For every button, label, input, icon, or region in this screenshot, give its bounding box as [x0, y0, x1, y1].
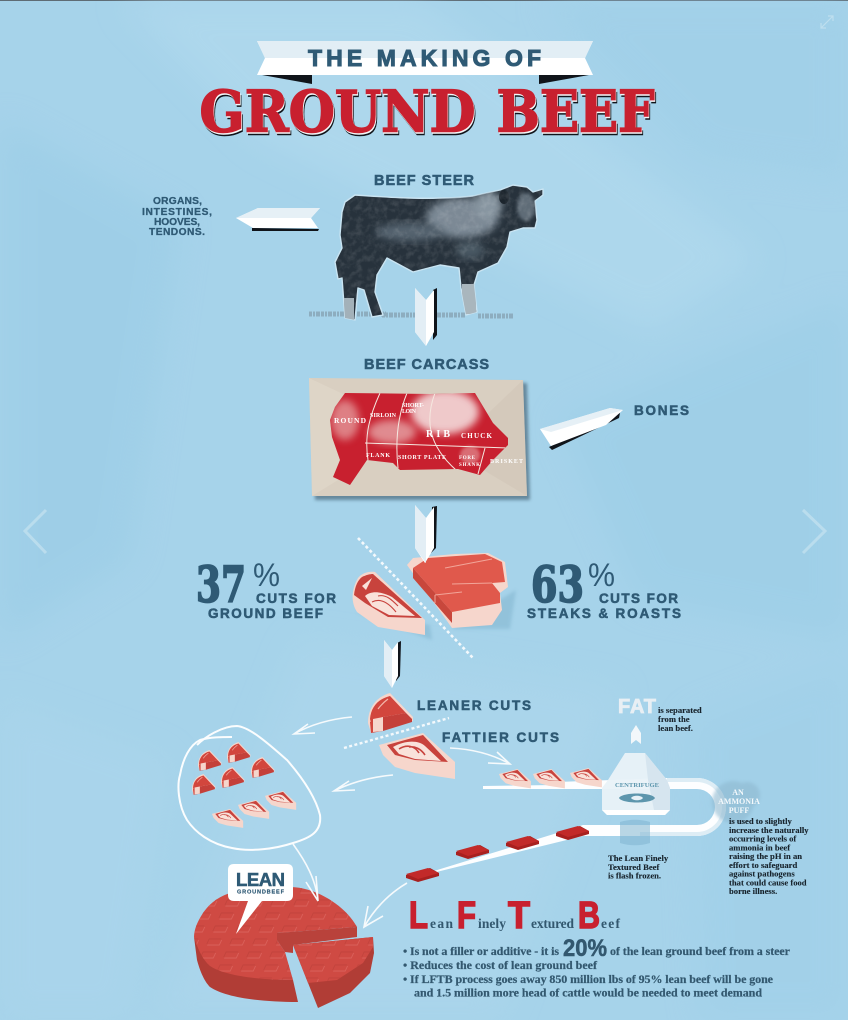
illustration: black steer	[309, 183, 547, 323]
stat: 37% cuts for ground beef: CUTS FOR	[256, 591, 336, 606]
steak: steaks and roasts share	[407, 553, 516, 629]
conveyor line	[408, 778, 726, 879]
text: flash frozen	[608, 853, 669, 880]
stat: 63% cuts for steaks and roasts: STEAKS & ROASTS	[527, 606, 681, 621]
steak: ground beef share	[353, 572, 432, 640]
stat: 63% cuts for steaks and roasts	[527, 555, 681, 621]
label: fattier cuts: FATTIER CUTS	[442, 730, 559, 745]
cut labels: ROUND	[334, 416, 367, 425]
text: ammonia explanation: against pathogens	[729, 868, 795, 878]
arrow: cuts to lean and fat sort	[384, 640, 401, 688]
label: centrifuge: CENTRIFUGE	[615, 782, 660, 789]
title: ground beef: GROUND	[200, 80, 476, 147]
stat: 37% cuts for ground beef	[196, 555, 336, 621]
text: ammonia explanation: occurring levels of	[729, 834, 796, 844]
cut: leaner	[368, 693, 413, 733]
title: ground beef: BEEF	[497, 80, 655, 147]
pile of cuts in a hand-drawn outline	[178, 726, 320, 850]
arrow: fat rising	[631, 725, 641, 744]
label: an ammonia puff	[718, 788, 760, 815]
heading: lean finely textured beef: T	[508, 895, 530, 937]
label: organs, intestines, hooves, tendons: TENDONS.	[149, 227, 205, 238]
label: organs, intestines, hooves, tendons: HOOVES,	[154, 217, 200, 228]
arrow: to organs	[236, 208, 320, 231]
cut: fattier	[379, 733, 455, 779]
bullet list: facts about LFTB: of the lean ground beef from a steer	[610, 944, 791, 958]
label: bones: BONES	[634, 403, 689, 418]
text: ammonia explanation: is used to slightly	[729, 816, 792, 826]
heading: lean finely textured beef: F	[457, 895, 476, 937]
label: leaner cuts: LEANER CUTS	[417, 698, 531, 713]
meat map	[330, 393, 508, 485]
cut labels: RIB	[426, 429, 450, 440]
arrow: carcass to cuts	[415, 505, 437, 563]
navigation chevron left	[25, 510, 46, 553]
spin icon	[619, 794, 655, 802]
text: flash frozen: is flash frozen.	[608, 870, 661, 880]
label: an ammonia puff: AMMONIA	[718, 797, 760, 806]
text: ammonia explanation: that could cause food	[729, 878, 807, 888]
text: fat is separated: is separated	[658, 705, 702, 715]
cut labels: SIRLOIN	[370, 413, 397, 419]
dotted divider: lean and fat	[344, 718, 449, 748]
label: beef carcass: BEEF CARCASS	[364, 357, 489, 373]
cut labels	[334, 403, 523, 468]
cut labels: BRISKET	[490, 459, 523, 465]
cut labels: FORE	[459, 456, 476, 461]
label: organs, intestines, hooves, tendons: INTESTINES,	[142, 207, 212, 218]
label: beef steer: BEEF STEER	[374, 173, 475, 189]
heading: lean finely textured beef: B	[578, 895, 600, 937]
label: an ammonia puff: AN	[732, 788, 744, 797]
heading: lean finely textured beef: inely	[478, 916, 506, 931]
text: flash frozen: The Lean Finely	[608, 853, 669, 863]
title: ground beef: GROUND	[200, 78, 476, 146]
text: ammonia explanation: increase the naturally	[729, 825, 809, 835]
arrow: blocks to ground beef	[364, 883, 407, 927]
speech bubble: lean ground beef: LEAN	[236, 869, 285, 890]
text: fat is separated	[658, 705, 702, 733]
heading: lean finely textured beef: eef	[601, 916, 620, 931]
arrow: fattier to pile	[334, 775, 393, 791]
text: fat is separated: lean beef.	[658, 723, 693, 733]
text: ammonia explanation: raising the pH in an	[729, 851, 802, 861]
bullet list: facts about LFTB: • If LFTB process goes away 850 million lbs of 95% lean beef will be gone	[403, 972, 774, 986]
arrow: pile to ground beef	[293, 844, 318, 901]
label: an ammonia puff: PUFF	[729, 806, 749, 815]
ground beef patty	[194, 886, 374, 1008]
patty wedge	[293, 937, 374, 1008]
bullet list: facts about LFTB: • Reduces the cost of lean ground beef	[403, 958, 598, 972]
inner cut	[277, 927, 357, 953]
stat: 63% cuts for steaks and roasts: 63	[531, 555, 584, 614]
text: ammonia explanation: effort to safeguard	[729, 860, 797, 870]
text: fat is separated: from the	[658, 714, 690, 724]
title: ground beef: GROUND	[201, 82, 477, 148]
bullet list: facts about LFTB: • Is not a filler or additive - it is	[403, 944, 559, 958]
title line: the making of: THE MAKING OF	[308, 45, 541, 71]
text: ammonia explanation: ammonia in beef	[729, 842, 790, 852]
title banner	[257, 41, 593, 84]
fatty trimmings on belt	[499, 768, 602, 788]
red frozen blocks	[406, 826, 589, 882]
arrow: steer to carcass	[415, 288, 437, 346]
cut labels: SHORT PLATE	[398, 455, 446, 461]
carcass map on paper	[309, 378, 530, 500]
stat: 63% cuts for steaks and roasts: %	[588, 557, 615, 593]
bullet list: facts about LFTB	[403, 935, 791, 1000]
cut labels: FLANK	[366, 453, 390, 459]
stat: 37% cuts for ground beef: %	[253, 557, 280, 593]
bullet list: facts about LFTB: 20%	[563, 935, 607, 962]
patty base	[194, 937, 298, 1002]
label: fat: FAT	[618, 696, 656, 718]
speech bubble: lean ground beef	[228, 864, 293, 934]
grass	[309, 314, 513, 316]
text: ammonia explanation: borne illness.	[729, 886, 777, 896]
heading: lean finely textured beef: ean	[430, 916, 453, 931]
arrow: to bones	[540, 408, 623, 450]
dotted divider: cuts	[358, 538, 473, 658]
heading: lean finely textured beef: extured	[531, 916, 574, 931]
cut labels: SHORT-	[402, 403, 424, 409]
title: ground beef	[200, 78, 656, 148]
text: ammonia explanation	[729, 816, 809, 896]
stat: 63% cuts for steaks and roasts: CUTS FOR	[599, 591, 678, 606]
stat: 37% cuts for ground beef: GROUND BEEF	[208, 606, 323, 621]
text: flash frozen: Textured Beef	[608, 862, 659, 872]
speech bubble: lean ground beef: GROUNDBEEF	[237, 890, 285, 896]
cut labels: CHUCK	[461, 432, 493, 440]
cut labels: LOIN	[402, 409, 417, 415]
cut labels: SHANK	[459, 463, 480, 468]
ammonia puff cloud	[712, 781, 760, 823]
heading: lean finely textured beef: L	[409, 895, 428, 937]
heading: lean finely textured beef	[409, 895, 620, 937]
centrifuge machine	[602, 753, 670, 815]
bullet list: facts about LFTB: and 1.5 million more head of cattle would be needed to meet demand	[414, 986, 762, 1000]
frozen block under centrifuge	[620, 820, 650, 845]
label: organs, intestines, hooves, tendons: ORGANS,	[153, 196, 202, 207]
stat: 37% cuts for ground beef: 37	[196, 555, 246, 614]
expand icon	[821, 16, 833, 28]
title: ground beef: BEEF	[496, 78, 654, 146]
arrow: leaner to pile	[294, 717, 352, 734]
title: ground beef: BEEF	[498, 82, 656, 148]
label: organs, intestines, hooves, tendons	[142, 196, 212, 238]
arrow: fattier to centrifuge	[450, 748, 510, 764]
navigation chevron right	[803, 510, 825, 553]
